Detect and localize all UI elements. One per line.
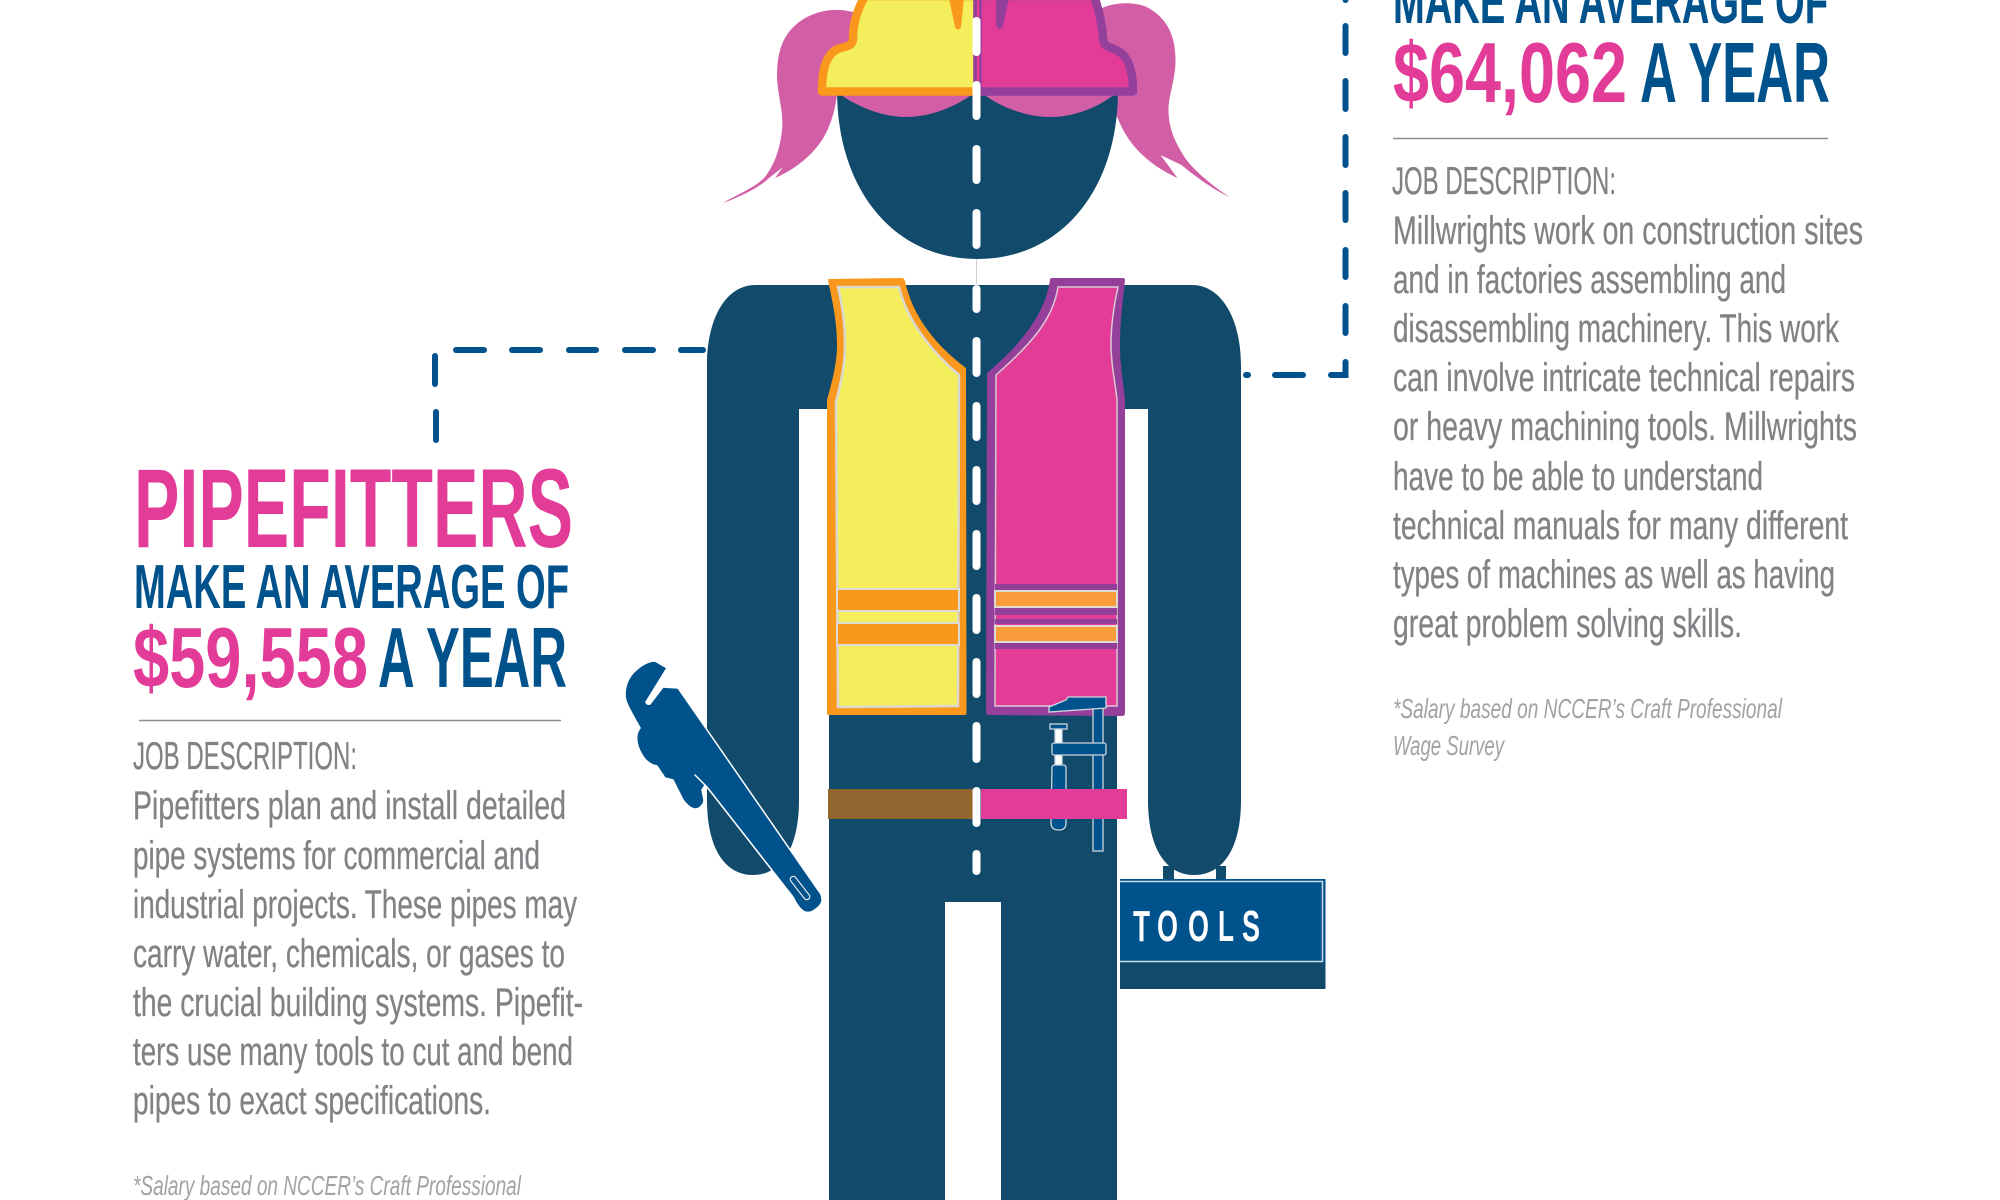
toolbox label: S [1242, 902, 1260, 951]
job description [1392, 160, 1863, 646]
panel: pipefitters [133, 446, 583, 1200]
hat vent marks [949, 0, 1009, 30]
rule [139, 720, 561, 722]
job description: pipes to exact specifications. [133, 1079, 491, 1123]
job description: Pipefitters plan and install detailed [133, 784, 566, 828]
vest: yellow side [827, 278, 966, 715]
reflective stripes [995, 584, 1117, 649]
job description: and in factories assembling and [1393, 258, 1786, 302]
salary figure: $59,558 [133, 611, 368, 706]
job description: the crucial building systems. Pipefit- [133, 981, 583, 1025]
salary period: A YEAR [1640, 26, 1830, 121]
toolbox label [1133, 902, 1260, 951]
panel: millwrights [1392, 0, 1863, 761]
icon: bar clamp [1049, 697, 1106, 851]
salary figure: $64,062 [1393, 26, 1627, 121]
connector: pipefitters [435, 350, 703, 440]
hair fringe [838, 93, 1116, 117]
salary period: A YEAR [378, 611, 567, 706]
connector: millwrights [1246, 0, 1346, 375]
toolbox handles [1163, 866, 1226, 880]
subheading: MAKE AN AVERAGE OF [134, 553, 569, 622]
rule [1393, 138, 1828, 140]
hard hat: pink half [978, 0, 1133, 92]
job description: pipe systems for commercial and [133, 834, 540, 878]
reflective stripes [837, 589, 959, 645]
toolbox label: T [1133, 902, 1150, 951]
body [707, 285, 1241, 1200]
hard hat: yellow half [822, 0, 978, 92]
job description: carry water, chemicals, or gases to [133, 932, 565, 976]
job description: industrial projects. These pipes may [133, 883, 577, 927]
job description: JOB DESCRIPTION: [1392, 160, 1616, 203]
centre dashed line [972, 21, 980, 871]
toolbox label: O [1188, 902, 1209, 951]
worker figure [625, 0, 1326, 1200]
job description: ters use many tools to cut and bend [133, 1030, 573, 1074]
heading: PIPEFITTERS [134, 446, 573, 571]
vest: pink side [986, 278, 1125, 716]
toolbox label: O [1157, 902, 1178, 951]
toolbox label: L [1218, 902, 1234, 951]
salary footnote [1393, 693, 1783, 761]
hat cover patch at centre [977, 0, 979, 86]
hair pigtails [723, 3, 1230, 203]
salary footnote: *Salary based on NCCER’s Craft Professional [1393, 693, 1783, 724]
belt [828, 789, 1127, 819]
neck line [976, 259, 978, 285]
job description: have to be able to understand [1393, 455, 1763, 499]
icon: pipe wrench [625, 661, 822, 912]
head [837, 90, 1118, 259]
toolbox [1120, 866, 1326, 989]
job description: great problem solving skills. [1393, 602, 1742, 646]
salary footnote: Wage Survey [1393, 730, 1505, 761]
job description [133, 735, 583, 1123]
job description: JOB DESCRIPTION: [133, 735, 357, 778]
